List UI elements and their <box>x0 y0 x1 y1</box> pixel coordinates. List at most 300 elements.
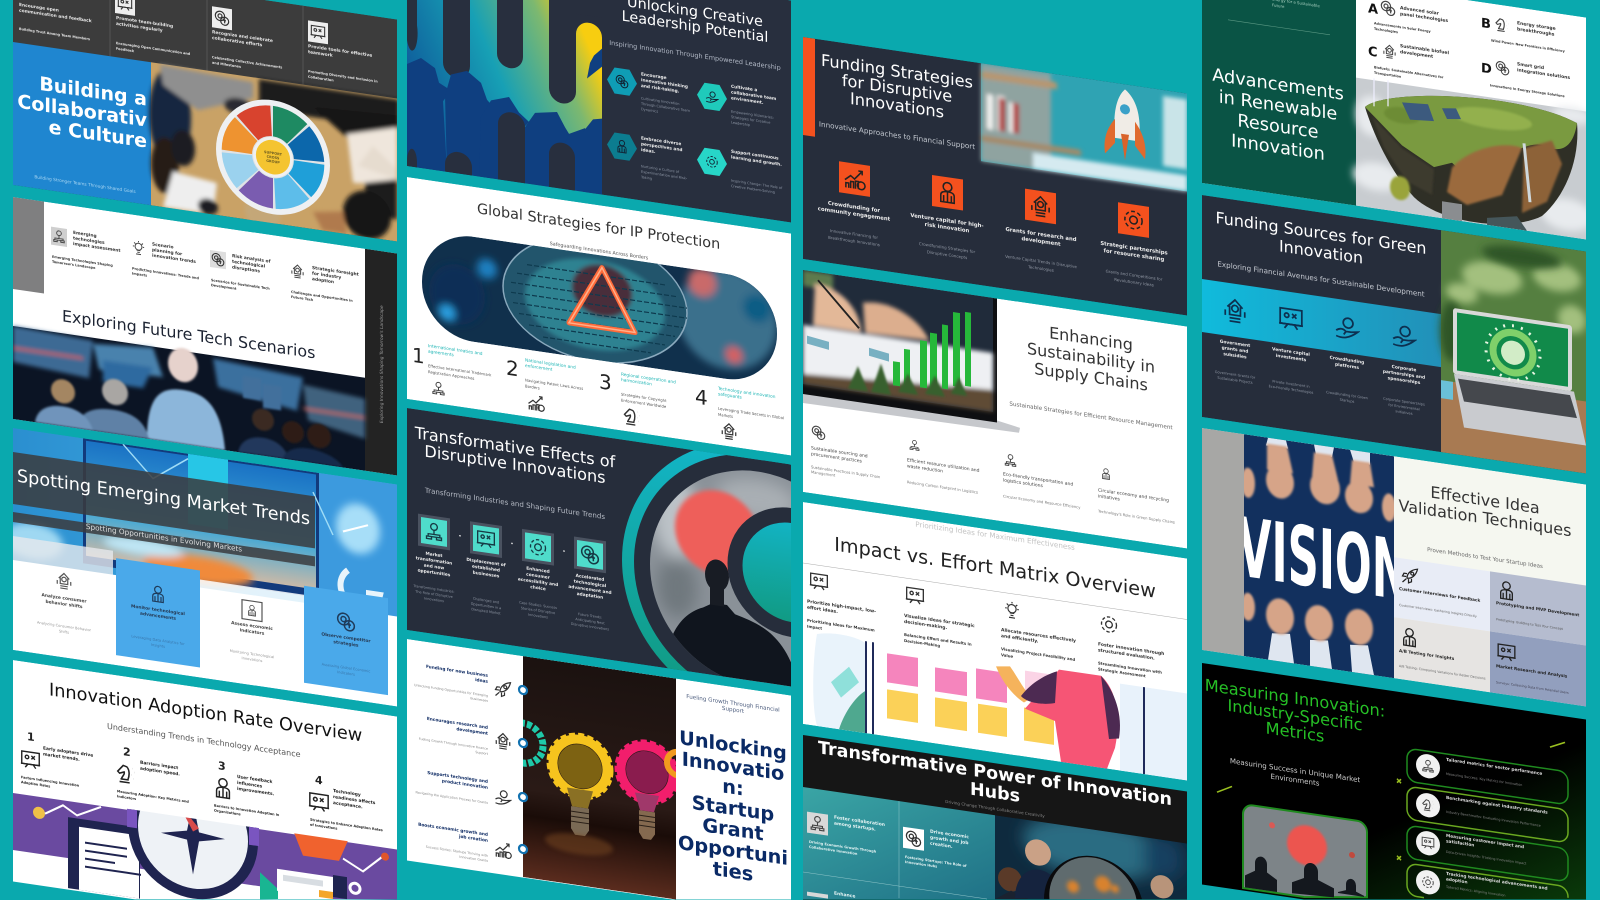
metric card 3: satisfaction <box>1446 838 1474 849</box>
title: Metrics <box>1266 718 1324 746</box>
scenario items: disruptions <box>232 264 260 275</box>
funding icons and labels: Crowdfunding for Green <box>1326 390 1368 400</box>
adoption items: market trends. <box>43 751 80 763</box>
title: Resource <box>1237 110 1319 143</box>
grant items: Support <box>475 750 489 756</box>
top cards with team practices <box>19 0 378 84</box>
title: in Renewable <box>1219 87 1337 125</box>
illustration: silhouettes and pills <box>407 0 602 207</box>
metric card 4: Tracking technological advancements and <box>1446 872 1548 892</box>
subtitle: Driving Change Through Collaborative Creativity <box>945 799 1045 819</box>
funding items: Revolutionary Ideas <box>1114 277 1154 288</box>
strategy items: safeguards <box>718 391 742 401</box>
funding items: for resource sharing <box>1104 248 1165 263</box>
top cards with team practices: Collaboration <box>308 75 334 83</box>
funding icons and labels: Government <box>1220 340 1250 349</box>
top cards with team practices: Building Trust Among Team Members <box>19 27 90 41</box>
item: diverse perspectives: Embrace diverse <box>641 136 681 147</box>
title: Collaborativ <box>17 90 148 132</box>
effect items: Stories of Disruptive <box>521 606 555 615</box>
effect items: Future Trends: <box>578 612 602 620</box>
funding items: Strategic partnerships <box>1100 241 1168 257</box>
adoption items: 4 <box>315 773 323 788</box>
photo: laptop with green bars <box>803 270 1020 435</box>
panel: Effective Idea Validation Techniques <box>1202 428 1586 706</box>
funding icons and labels: subsidies <box>1223 351 1247 361</box>
item: diverse perspectives <box>607 130 688 186</box>
panel: Measuring Innovation: Industry-Specific Metrics <box>1202 663 1586 900</box>
effect items: businesses <box>473 570 500 580</box>
method grid: Surveys: Collecting Data from Potential Users <box>1496 680 1569 695</box>
strategy items: 4 <box>695 384 708 410</box>
card: competitor strategies <box>304 586 388 695</box>
funding icons and labels: investments <box>1276 353 1307 363</box>
grant items: Unlocking Funding Opportunities for Emerging <box>414 683 488 698</box>
title: Startup <box>692 791 774 826</box>
title: Building a <box>39 72 147 111</box>
card: economic indicators <box>230 598 274 665</box>
effect items: and new <box>424 562 444 571</box>
circular photo: man facing red sphere <box>647 453 799 696</box>
metric card 3: Measuring customer impact and <box>1446 834 1524 850</box>
item A: solar panels: A <box>1368 1 1379 18</box>
vertical side text: Exploring Innovations Shaping Tomorrow's Landscape <box>379 305 385 424</box>
blue title panel <box>13 42 151 205</box>
supply chain items: waste reduction <box>907 463 943 475</box>
effect items: choice <box>530 584 546 592</box>
gray side strip <box>1202 428 1244 656</box>
grant items: Funding for new business <box>426 665 488 679</box>
panel: Innovation Adoption Rate Overview <box>13 660 397 900</box>
title band <box>13 452 315 548</box>
grant items: development <box>456 726 488 737</box>
matrix items: and efficiently. <box>1001 633 1039 645</box>
matrix items: Decision-Making <box>904 638 940 648</box>
funding items: Venture capital for high- <box>910 213 984 230</box>
title: Advancements <box>1212 65 1344 105</box>
funding items: Crowdfunding for <box>828 201 880 214</box>
pill photo: warning triangle under magnifier <box>422 212 777 388</box>
effect items: Innovations <box>424 596 444 603</box>
supply chain items: Reducing Carbon Footprint in Logistics <box>907 480 978 495</box>
subtitle: Fueling Growth Through Financial <box>686 694 780 714</box>
adoption items: 3 <box>218 759 226 773</box>
hub items: creation. <box>930 841 953 850</box>
card: technological advancements <box>116 558 200 667</box>
panel: Advancements in Renewable Resource Innovation <box>1202 0 1593 240</box>
strategy items: 3 <box>599 369 612 395</box>
title: Innovations <box>850 89 944 122</box>
funding icons and labels: platforms <box>1335 362 1359 371</box>
scenario items: Emerging Technologies Shaping <box>52 255 113 268</box>
matrix items: Prioritizing Ideas for Maximum <box>807 618 875 633</box>
subtitle: Spotting Opportunities in Evolving Markets <box>86 522 242 554</box>
photo: people with holograms <box>13 323 365 471</box>
effect items: accessibility and <box>518 576 558 588</box>
grant items: job creation <box>458 834 488 844</box>
title: ties <box>713 857 753 886</box>
matrix items: Impact <box>807 624 822 631</box>
top cards with team practices: Promoting Diversity and Inclusion in <box>308 69 378 84</box>
subtitle: Prioritizing Ideas for Maximum Effectiveness <box>915 520 1075 552</box>
grant items: Navigating the Application Process for Grants <box>416 790 488 805</box>
scenario items: impact assessment <box>73 241 121 254</box>
effect items: Enhanced <box>526 567 550 575</box>
top cards with team practices: Feedback <box>116 47 135 53</box>
photo: laptop among plants <box>1440 230 1586 473</box>
supply chain items: procurement practices <box>811 451 862 465</box>
orange accent strip <box>803 37 815 137</box>
metric card 2: Benchmarking against industry standards <box>1446 795 1548 816</box>
supply chain items: Circular Economy and Resource Efficiency <box>1003 494 1081 510</box>
green title panel <box>1202 0 1356 206</box>
subtitle: Inspiring Innovation Through Empowered Leadership <box>609 39 781 72</box>
card: technological advancements: Leveraging Data Analytics for <box>131 634 185 646</box>
grant items: Supports technology and <box>427 771 488 785</box>
item: continuous learning: learning and growth. <box>731 154 782 168</box>
effect items: The Role of Disruptive <box>414 589 453 599</box>
photo: team around wheel <box>149 62 399 250</box>
item: diverse perspectives: perspectives and <box>641 141 682 153</box>
funding items: Grants for research and <box>1005 227 1077 243</box>
effect items: Innovations <box>528 613 548 620</box>
item C: biofuel: Biofuels: Sustainable Alternatives for <box>1374 65 1443 79</box>
funding icons and labels: Crowdfunding <box>1330 356 1364 366</box>
funding icons and labels: Government Grants for <box>1215 370 1255 380</box>
column 4 of slides <box>1202 0 1593 900</box>
strategy items: International treaties and <box>428 344 483 357</box>
method grid: A/B Testing: Comparing Variations for Better Decisions <box>1399 664 1486 681</box>
adoption items: Early adopters drive <box>43 746 93 759</box>
hub items: Innovation Hubs <box>905 860 937 869</box>
adoption items: readiness affects <box>333 794 376 806</box>
effect items: Transforming Industries: <box>413 584 455 594</box>
white lower strip <box>13 560 397 706</box>
hub items: among startups. <box>834 821 876 833</box>
strategy items: 2 <box>506 356 519 381</box>
metric card 4 <box>1407 863 1568 900</box>
support wheel: SUPPORT <box>264 150 282 157</box>
item: innovative thinking: Through Collaborative Team <box>640 102 691 113</box>
effect items: Market <box>426 552 442 559</box>
strategy items: Markets <box>718 412 733 419</box>
funding icons and labels: Sustainable Projects <box>1217 376 1253 385</box>
matrix items: Value <box>1001 652 1013 659</box>
strategy items: agreements <box>428 349 454 358</box>
matrix items: Balancing Effort and Results in <box>904 632 972 647</box>
top cards with team practices: activities regularly <box>116 21 163 34</box>
subtitle: Sustainable Strategies for Efficient Resource Management <box>1009 401 1173 431</box>
item C: biofuel <box>1368 38 1449 86</box>
card: economic indicators: Innovations <box>242 656 263 663</box>
metric card 2 <box>1407 786 1568 843</box>
card: consumer behavior: Analyzing Consumer Behavior <box>37 621 91 632</box>
hub items: growth and job <box>930 835 969 846</box>
matrix items: Strategic Assessment <box>1098 666 1146 678</box>
supply chain items: Technology's Role in Green Supply Chains <box>1097 509 1175 525</box>
panel: Unlocking Innovation: Startup Grant Opportunities <box>407 639 791 900</box>
adoption items: improvements. <box>237 786 275 797</box>
hub items: Drive economic <box>930 830 969 840</box>
funding items: risk innovation <box>925 222 970 234</box>
column 3 of slides <box>803 37 1187 900</box>
funding items: Innovative Financing for <box>830 228 878 240</box>
item: continuous learning: Inspiring Change: The Role of <box>731 179 782 190</box>
subtitle: Building Stronger Teams Through Shared Goals <box>34 174 136 195</box>
decorative dashes and crosses <box>1217 691 1565 884</box>
photo: floating green island <box>1353 75 1593 240</box>
scenario items: technologies <box>73 235 105 246</box>
effect items: adaptation <box>577 591 603 601</box>
metric card 2: Industry Benchmarks: Evaluating Innovation Performance <box>1446 810 1541 828</box>
item B: energy storage: breakthroughs <box>1517 26 1555 38</box>
scenario items: Challenges and Opportunities in <box>291 290 353 303</box>
subtitle: Transforming Industries and Shaping Future Trends <box>424 486 605 521</box>
item B: energy storage: Wind Power: New Frontiers in Efficiency <box>1491 38 1566 53</box>
hub items: Enhance <box>834 891 855 900</box>
top cards with team practices: teamwork <box>308 49 334 59</box>
effect items: opportunities <box>418 568 451 578</box>
subtitle: Exploring Financial Avenues for Sustainable Development <box>1217 259 1425 299</box>
matrix items: effort ideas. <box>807 605 838 615</box>
scenario items: Future Tech <box>291 295 314 302</box>
subtitle band <box>13 512 315 566</box>
blue band <box>1202 279 1441 367</box>
panel: Enhancing Sustainability in Supply Chains <box>803 270 1187 548</box>
title: Opportuni <box>678 831 788 870</box>
illustration: compass and clipboard <box>13 793 397 900</box>
card tints <box>200 580 304 603</box>
effect items: Opportunities in a <box>471 602 501 610</box>
panel: Building a Collaborative Culture <box>13 0 399 250</box>
item: collaborative team: Empowering Visionaries: <box>731 110 774 120</box>
adoption items: Adoption Rates <box>21 780 50 788</box>
metric card 1 <box>1407 748 1568 805</box>
strategy items: 1 <box>412 343 425 369</box>
title: Sustainability in <box>1027 339 1155 377</box>
supply chain items: initiatives <box>1098 493 1121 503</box>
metric card 4: adoption <box>1446 876 1468 886</box>
method grid <box>1394 557 1586 706</box>
adoption items: of Innovations <box>310 823 337 831</box>
panel: Transformative Power of Innovation Hubs <box>803 735 1187 900</box>
inner teal disc with dark ring <box>735 507 849 638</box>
grant items: Boosts economic growth and <box>418 823 488 838</box>
item: continuous learning: Support continuous <box>731 150 779 162</box>
method grid: Prototyping: Building to Test Your Concept <box>1496 617 1564 631</box>
strategy items: harmonization <box>621 377 652 388</box>
dark side strip <box>365 249 397 475</box>
hub items: Collaborative Innovation <box>809 845 858 856</box>
title: Impact vs. Effort Matrix Overview <box>834 533 1156 603</box>
funding icons and labels: Private Investment in <box>1272 379 1310 389</box>
supply chain items: Efficient resource utilization and <box>907 458 980 474</box>
teal cards <box>803 787 995 900</box>
method grid: A/B Testing for Insights <box>1399 648 1455 661</box>
title: Innovatio <box>682 747 784 785</box>
subtitle: Measuring Success in Unique Market <box>1230 756 1360 784</box>
effect items: Accelerated <box>576 574 604 583</box>
effect items: consumer <box>526 572 551 581</box>
funding icons and labels: Initiatives <box>1395 409 1413 416</box>
effect items: technological <box>574 579 607 589</box>
item: collaborative team: collaborative team <box>731 89 777 102</box>
grant items: Businesses <box>470 696 488 703</box>
card: technological advancements: Monitor technological <box>131 604 185 617</box>
item: collaborative team: Strategies for Creative <box>731 115 770 125</box>
card: consumer behavior: Analyze consumer <box>41 593 87 605</box>
title: Funding Sources for Green <box>1216 208 1426 258</box>
panel: Transformative Effects of Disruptive Innovations <box>407 398 888 729</box>
strategy items: Enforcement Worldwide <box>621 397 667 409</box>
title: for Disruptive <box>842 71 952 106</box>
matrix items: Visualize ideas for strategic <box>904 614 975 629</box>
photo: gear light bulbs <box>503 653 691 900</box>
item: diverse perspectives: Nurturing a Culture of <box>641 164 679 174</box>
funding icons and labels: Eco-Friendly Technologies <box>1269 384 1314 395</box>
photo: team around glowing sphere <box>995 803 1187 900</box>
thin rule <box>1228 20 1330 35</box>
top cards with team practices: Encourage open <box>19 3 59 14</box>
funding items: Disruptive Concepts <box>927 249 967 260</box>
grant items <box>414 662 511 866</box>
scenario items: Scenarios for Sustainable Tech <box>211 278 270 291</box>
item C: biofuel: Sustainable biofuel <box>1400 44 1449 56</box>
metric card 4: Tailored Metrics: Aligning Innovation <box>1445 885 1505 898</box>
subtitle: Safeguarding Innovations Across Borders <box>550 241 649 262</box>
top cards with team practices: Celebrating Collective Achievements <box>212 55 282 70</box>
adoption items: Barriers to Innovation Adoption in <box>214 804 279 817</box>
hub items: Fostering Startups: The Role of <box>905 855 967 868</box>
subtitle: Future <box>1272 2 1285 9</box>
title: Transformative Power of Innovation <box>818 738 1172 810</box>
supply chain items: Eco-friendly transportation and <box>1003 472 1073 488</box>
top cards with team practices: Encouraging Open Communication and <box>116 41 190 56</box>
adoption items: User feedback <box>237 775 272 785</box>
column 1 of slides <box>3 0 399 900</box>
adoption items: 2 <box>123 745 131 759</box>
support wheel: CROSS <box>267 155 280 161</box>
item C: biofuel: C <box>1368 44 1378 61</box>
adoption items: Barriers impact <box>140 761 178 771</box>
adoption items: Technology <box>333 789 361 798</box>
supply chain items: logistics solutions <box>1003 477 1043 489</box>
effect items: Anticipating Next <box>575 617 605 626</box>
adoption items: influences <box>237 780 263 790</box>
support wheel <box>216 100 330 215</box>
funding items: Technologies <box>1027 264 1054 273</box>
effect items: Disrupted Market <box>471 607 501 616</box>
support wheel: GROUP <box>266 159 280 165</box>
grant items: ideas <box>475 677 488 685</box>
effect items: established <box>472 564 500 574</box>
metric card 3 <box>1407 825 1568 882</box>
title: Spotting Emerging Market Trends <box>17 467 310 530</box>
matrix items <box>807 572 1164 681</box>
strategy items: Leveraging Trade Secrets in Global <box>718 406 784 420</box>
teal ring <box>628 430 888 729</box>
strategy items <box>412 341 784 447</box>
grant items: Fueling Growth Through Innovative Finance <box>419 737 488 751</box>
strategy items: enforcement <box>525 363 553 373</box>
supply chain items: Management <box>811 470 836 478</box>
subtitle: Environments <box>1271 772 1320 788</box>
item: innovative thinking: Cultivating Innovation <box>641 96 679 106</box>
column 2 of slides <box>407 0 791 900</box>
scenario items: adoption <box>312 276 334 285</box>
title: Unlocking <box>679 726 787 765</box>
scenario items: Scenario <box>152 242 173 251</box>
effect items: Challenges and <box>473 597 499 605</box>
funding icons and labels: for Environmental <box>1388 403 1420 411</box>
gray corner block <box>13 197 44 294</box>
title: Funding Strategies <box>821 51 973 92</box>
top cards with team practices: and Milestones <box>212 61 241 69</box>
item A: solar panels: Technologies <box>1374 27 1398 34</box>
photo: market tech background <box>3 427 397 706</box>
metric card 1: Measuring Success: Key Metrics for Innovation <box>1446 772 1522 787</box>
adoption items <box>21 729 383 837</box>
scenario items: Development <box>211 283 237 291</box>
top cards with team practices: Promote team-building <box>116 16 173 30</box>
effect items: Displacement of <box>466 558 506 568</box>
grant items: Success Stories: Startups Thriving with <box>426 845 488 858</box>
funding icons and labels: partnerships and <box>1383 369 1425 381</box>
item: continuous learning: Creative Problem-Solving <box>731 184 775 194</box>
scenario items: planning for <box>152 247 183 258</box>
funding icons and labels: Corporate <box>1392 365 1416 374</box>
scenario items: Tomorrow's Landscape <box>52 260 96 270</box>
strategy items: Borders <box>525 383 540 391</box>
item: collaborative team: Leadership <box>731 120 751 127</box>
funding icons and labels: Startups <box>1340 398 1355 404</box>
matrix items: Foster innovation through <box>1098 642 1164 657</box>
item: diverse perspectives: Taking <box>640 175 652 181</box>
item: collaborative team: Cultivate a <box>731 85 757 93</box>
title: Industry-Specific <box>1227 696 1363 735</box>
panel: Exploring Future Tech Scenarios <box>13 197 397 475</box>
title: Transformative Effects of <box>415 423 615 472</box>
title: n: <box>722 774 744 800</box>
item A: solar panels: panel technologies <box>1400 11 1448 24</box>
item: continuous learning <box>697 144 783 196</box>
item C: biofuel: Transportation <box>1374 71 1402 79</box>
adoption items: 1 <box>27 730 35 744</box>
strategy items: Regional cooperation and <box>621 372 676 386</box>
panel: Impact vs. Effort Matrix Overview <box>803 502 1187 780</box>
title: Innovation <box>1279 236 1363 268</box>
adoption items: Organizations <box>214 809 241 816</box>
method grid: Prototyping and MVP Development <box>1496 600 1579 617</box>
card: competitor strategies: Observe competitor <box>321 632 371 645</box>
title: Exploring Future Tech Scenarios <box>62 306 315 362</box>
effect items: transformation <box>416 555 452 567</box>
item C: biofuel: development <box>1400 49 1434 60</box>
item: diverse perspectives: Experimentation and Risk- <box>641 170 688 181</box>
hub items: Driving Economic Growth Through <box>809 840 876 854</box>
strategy items: Effective International Trademark <box>428 363 491 377</box>
panel: Funding Strategies for Disruptive Innovations <box>803 37 1187 315</box>
card: competitor strategies: Assessing Global Economic <box>322 662 370 674</box>
panel: Funding Sources for Green Innovation <box>1202 195 1586 473</box>
photo: VISION with fists: VISION <box>1238 500 1408 620</box>
effect items: advancement and <box>568 584 612 596</box>
hub items: Foster collaboration <box>834 816 885 828</box>
funding items: community engagement <box>818 206 891 223</box>
strategy items: National legislation and <box>525 358 576 371</box>
scenario items <box>51 227 359 309</box>
grant items: product innovation <box>442 778 488 791</box>
